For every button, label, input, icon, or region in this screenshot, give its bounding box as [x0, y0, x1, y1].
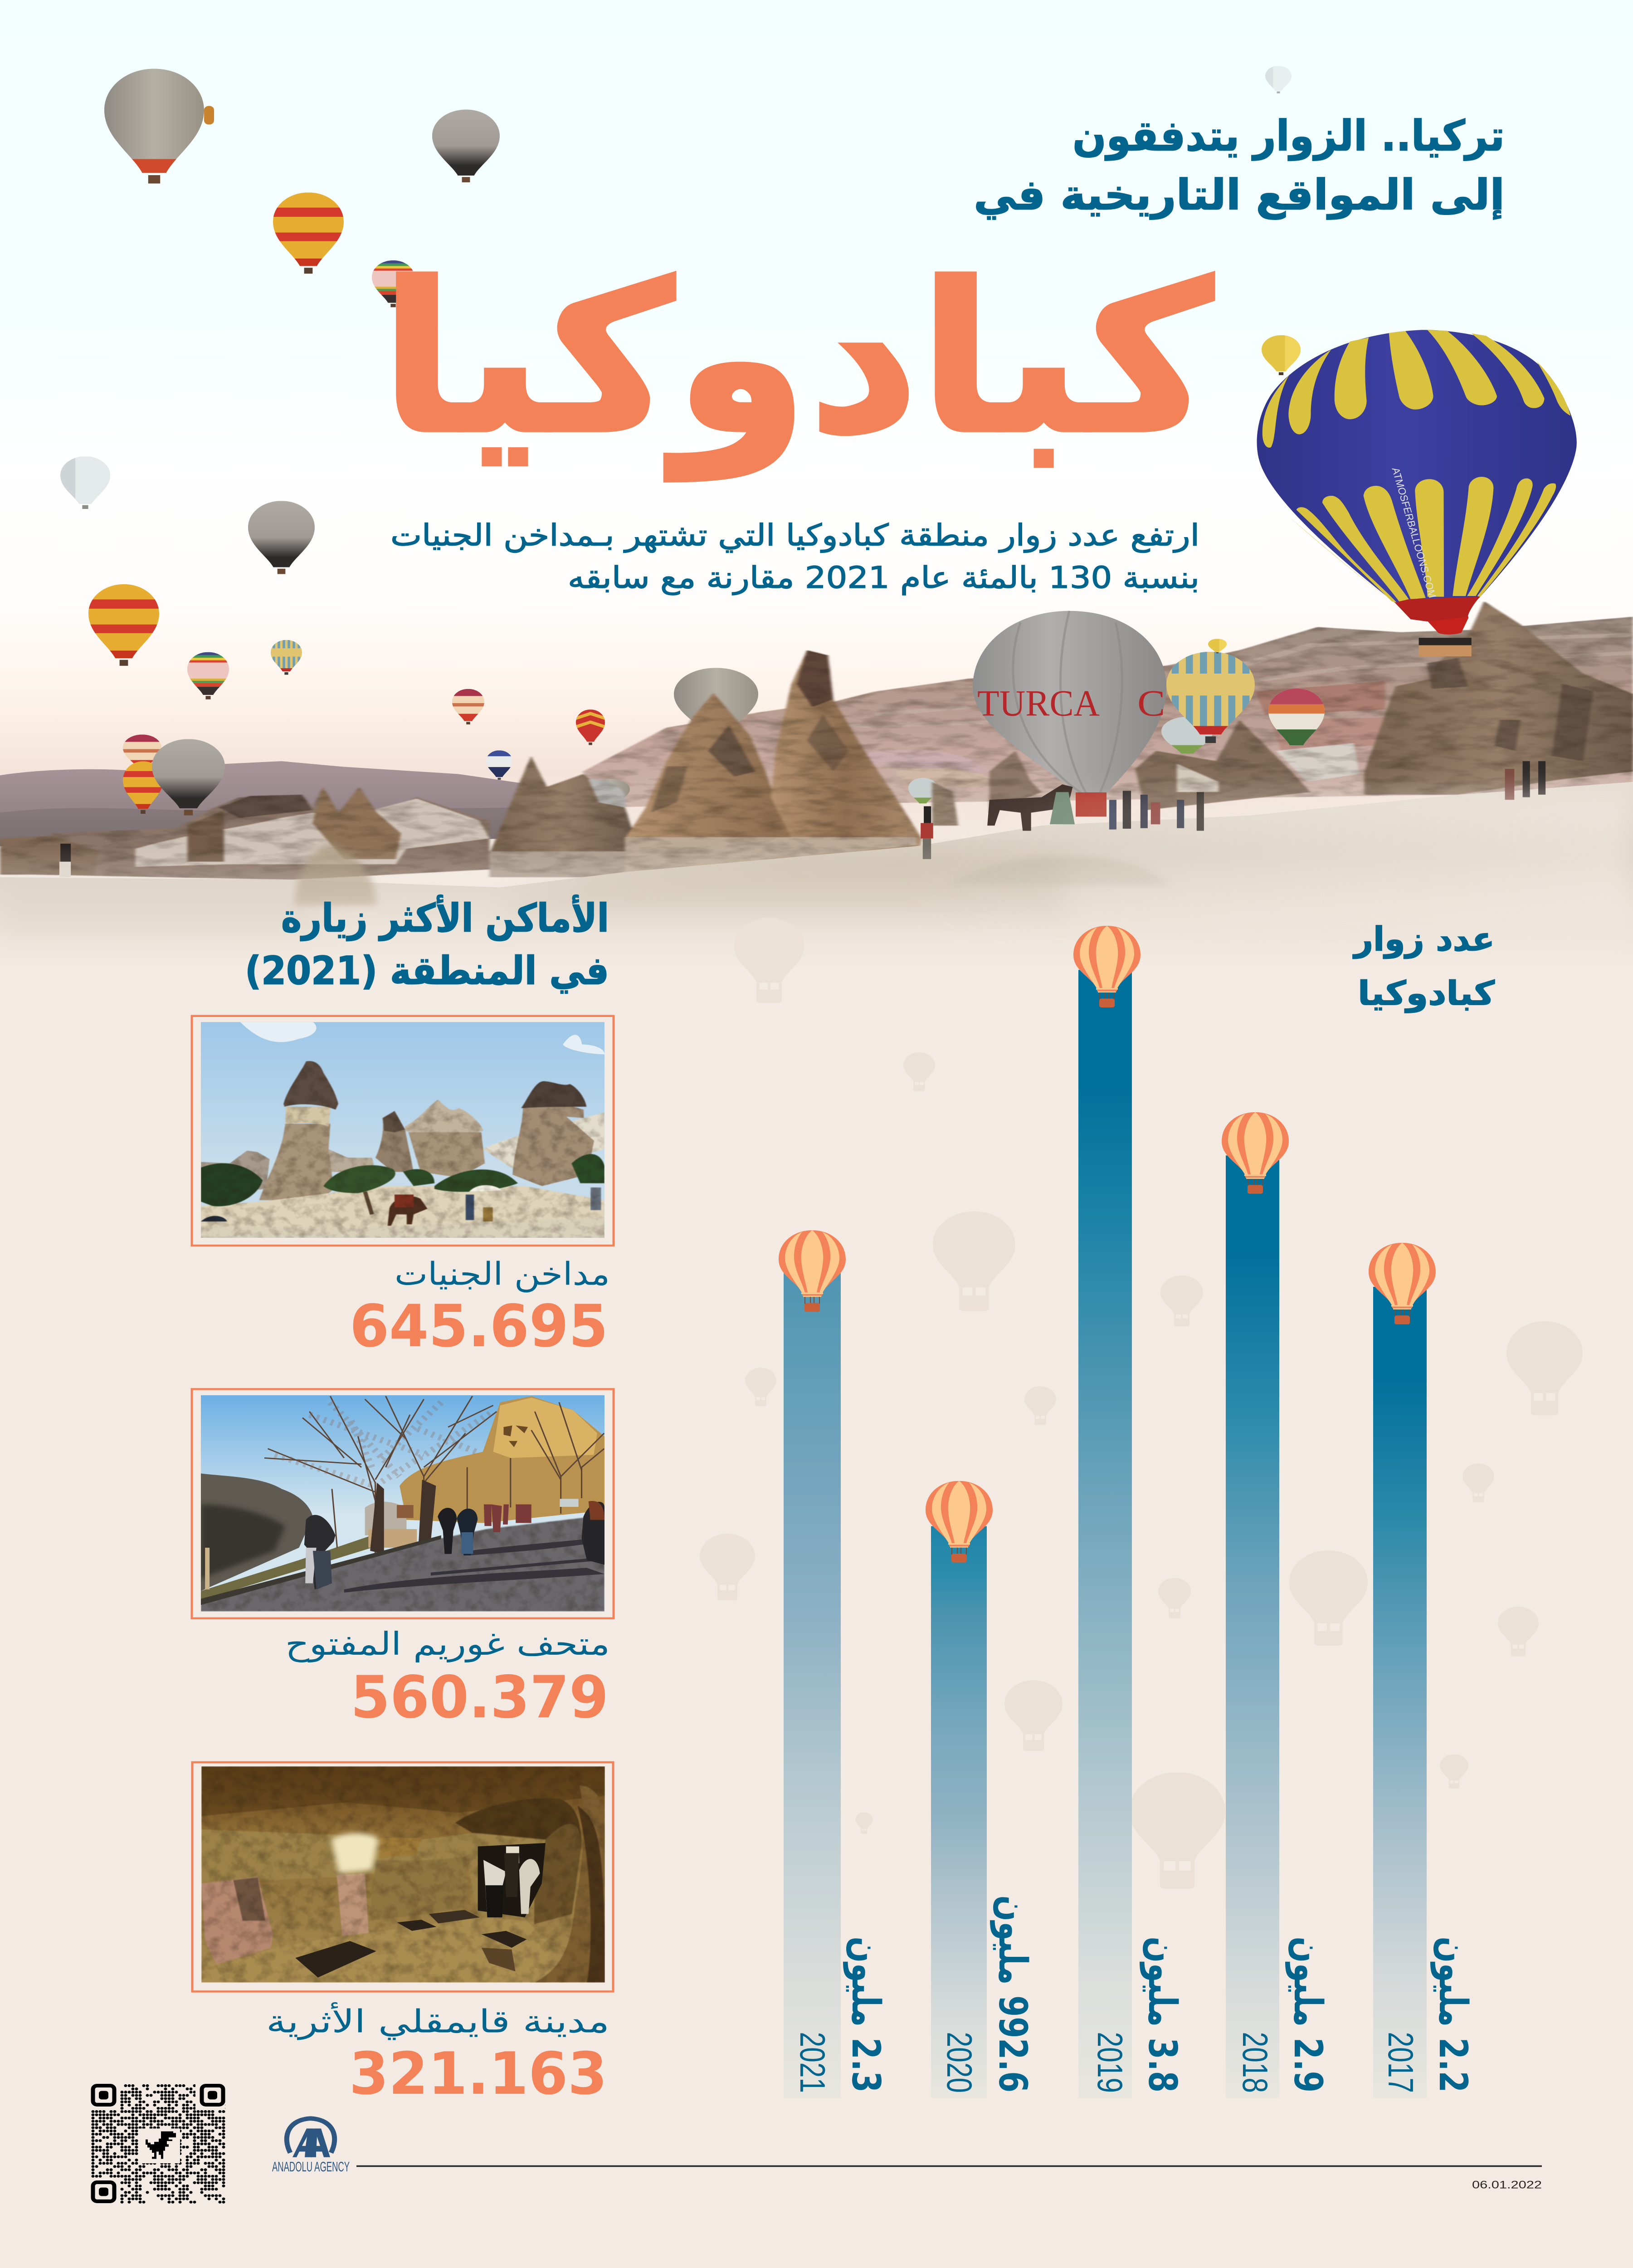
icon: dino in QR: [146, 2131, 176, 2159]
tree and shrubs: [295, 844, 1170, 905]
balloon: pale green: [1161, 717, 1213, 753]
bar: 2017: 2.2 مليون: [1430, 1936, 1476, 2092]
balloon: big grey TURCA: C: [1137, 682, 1165, 723]
bar: 2021: [779, 1230, 888, 2098]
label: fairy chimneys: [350, 1256, 610, 1360]
bar: 2019: [1073, 926, 1185, 2098]
balloon: blue yellow stripes: [1166, 652, 1255, 743]
label: Goreme open air museum: متحف غوريم المفتوح: [285, 1626, 610, 1662]
label: Goreme open air museum: [285, 1626, 610, 1731]
balloon: rainbow small: [187, 652, 229, 699]
main title: كبادوكيا: [380, 239, 1216, 482]
big blue and yellow balloon: ATMOSFERBALLOONS.COM: [1389, 467, 1438, 599]
balloon: faint top: [1265, 66, 1292, 93]
label: Goreme open air museum: 560.379: [351, 1664, 609, 1731]
distant mountains: [0, 761, 521, 846]
balloon: rainbow: [372, 260, 414, 307]
pointed rocks group centre: [489, 650, 921, 877]
balloon: tiny yellow: [271, 640, 302, 675]
label: Kaymakli underground city: 321.163: [349, 2040, 607, 2108]
bar: 2021: 2021: [793, 2032, 833, 2093]
balloon: small yellow above stripes: [1208, 639, 1227, 653]
panel: Kaymakli underground city photo: [192, 1762, 613, 1991]
people and horses on the path: [59, 761, 1545, 877]
section heading: most visited places: [245, 895, 609, 993]
photo: fairy chimneys: [201, 1022, 604, 1238]
balloon: small white: [908, 778, 937, 803]
sand shading, tree and bushes: [0, 856, 1066, 942]
balloon: small yellow near big balloon: [1262, 335, 1301, 375]
balloon: yellow red: [273, 192, 344, 274]
left rock mass: [0, 787, 489, 880]
panel: fairy chimneys photo: [192, 1016, 614, 1246]
balloon: grey behind rocks: [674, 668, 758, 734]
balloon: red: [452, 689, 484, 724]
subtitle text: [390, 518, 1199, 595]
bar: 2020: [926, 1481, 1035, 2098]
red and pink striped cliffs: [583, 617, 1633, 807]
label: fairy chimneys: 645.695: [350, 1292, 608, 1360]
balloon: yellow red mid: [88, 584, 159, 666]
rocks behind balloons at the right: [932, 720, 1359, 826]
chart heading: number of visitors: [1352, 920, 1495, 1013]
balloon: grey large: [104, 69, 214, 184]
rock formations and valley: [0, 601, 1633, 880]
bar: 2020: 2020: [940, 2032, 980, 2093]
Anadolu Agency logo: ANADOLU AGENCY: [272, 2159, 350, 2175]
bar chart: visitors per year: [779, 926, 1476, 2098]
bar: 2019: 3.8 مليون: [1140, 1936, 1185, 2092]
balloon: small grey: [590, 779, 630, 805]
balloon: grey dark bottom: [432, 110, 500, 182]
balloon: yellow low: [123, 761, 163, 814]
big blue and yellow balloon: [1257, 330, 1577, 656]
section heading: most visited places: في المنطقة (2021): [245, 948, 609, 993]
chart heading: number of visitors: عدد زوار: [1352, 920, 1495, 958]
small floating balloons in the sky: [60, 66, 1301, 816]
balloon: red top: [123, 734, 161, 771]
label: Kaymakli underground city: [266, 2002, 609, 2108]
balloon: grey mid left: [248, 501, 315, 574]
faint background balloons: [700, 918, 1583, 1889]
bar: 2018: 2018: [1235, 2032, 1275, 2093]
section heading: most visited places: الأماكن الأكثر زيارة: [281, 895, 609, 941]
balloon: white left: [60, 456, 110, 509]
title intro lines: إلى المواقع التاريخية في: [974, 171, 1505, 220]
panel: Goreme open air museum photo: [192, 1389, 614, 1618]
chart heading: number of visitors: كبادوكيا: [1358, 974, 1495, 1013]
photo: underground city: [201, 1766, 605, 1983]
bar: 2017: 2017: [1381, 2032, 1421, 2093]
title intro lines: تركيا.. الزوار يتدفقون: [1072, 112, 1505, 161]
balloon: grey low: [152, 739, 225, 816]
label: fairy chimneys: مداخن الجنيات: [395, 1256, 610, 1292]
bar: 2020: 992.6 مليون: [990, 1895, 1035, 2092]
Anadolu Agency logo: [272, 2118, 350, 2175]
bar: 2018: 2.9 مليون: [1285, 1936, 1331, 2092]
balloon: big grey TURCA: TURCA: [977, 682, 1100, 723]
balloon: big grey TURCA: [973, 611, 1166, 816]
bar: 2018: [1222, 1112, 1331, 2098]
bar: 2019: 2019: [1090, 2032, 1130, 2093]
QR code: [91, 2084, 225, 2204]
subtitle text: بنسبة 130 بالمئة عام 2021 مقارنة مع سابقه: [568, 560, 1199, 595]
big rock on the right: [1365, 601, 1633, 795]
footer rule: [356, 2165, 1542, 2167]
valley ground and mist: [0, 761, 1633, 1011]
bar: 2021: 2.3 مليون: [843, 1936, 888, 2092]
photo: Goreme road: [201, 1395, 604, 1612]
mist overlay: [0, 845, 1633, 1011]
balloon: blue white: [486, 750, 512, 780]
balloon: red white green: [1268, 689, 1325, 745]
balloon: red yellow: [576, 709, 605, 745]
label: Kaymakli underground city: مدينة قايمقلي الأثرية: [266, 2002, 609, 2040]
title intro lines: [974, 112, 1505, 220]
date: 06.01.2022: [1472, 2179, 1542, 2191]
subtitle text: ارتفع عدد زوار منطقة كبادوكيا التي تشتهر بـمداخن الجنيات: [390, 518, 1199, 553]
bar: 2017: [1369, 1243, 1476, 2098]
